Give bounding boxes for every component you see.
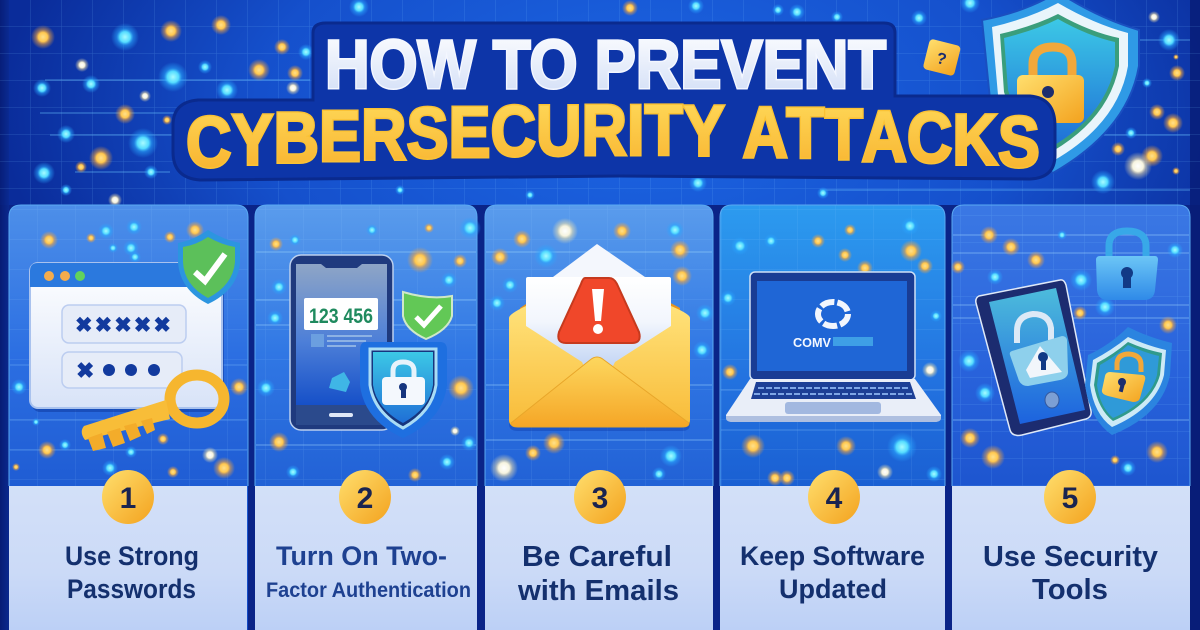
number badge 2: 2 xyxy=(357,482,373,515)
login window icon: ✖✖✖✖✖ xyxy=(75,314,173,337)
panel 1 background xyxy=(9,205,248,630)
number badge 2 xyxy=(339,470,391,524)
title line one: HOW TO PREVENT xyxy=(325,26,886,103)
smartphone with code: 123 456 xyxy=(309,305,373,328)
panel 5: use security tools xyxy=(951,205,1190,630)
small gold tag icon: ? xyxy=(935,50,948,69)
panel 2 background xyxy=(255,205,481,630)
open envelope with warning xyxy=(509,244,690,431)
small gold tag icon xyxy=(923,39,961,76)
panel 5 background xyxy=(951,205,1190,630)
number badge 4: 4 xyxy=(826,482,843,515)
tilted phone with lock xyxy=(976,280,1091,435)
laptop xyxy=(726,272,941,422)
number badge 5: 5 xyxy=(1062,482,1078,515)
smartphone with code xyxy=(290,255,393,430)
shield with gold padlock, top right xyxy=(982,0,1139,173)
step 3 label: Be Careful xyxy=(522,541,672,573)
number badge 1: 1 xyxy=(120,482,136,515)
title banner xyxy=(173,23,1055,183)
step 5 label: Use Security xyxy=(983,541,1158,573)
step 3 label: with Emails xyxy=(517,575,679,607)
title line two: CYBERSECURITY ATTACKS xyxy=(186,91,1040,183)
step 1 label: Use Strong xyxy=(65,541,199,571)
step 4 label: Keep Software xyxy=(740,541,925,571)
panel 2: two-factor authentication xyxy=(255,205,481,630)
panel 1: use strong passwords xyxy=(9,205,248,630)
step 5 label: Tools xyxy=(1032,574,1108,606)
panel 3: be careful with emails xyxy=(485,205,714,630)
screen label: COMV xyxy=(793,335,831,350)
panel 4: keep software updated xyxy=(720,205,945,630)
padlock shackle and body xyxy=(1017,47,1084,123)
step 2 footer xyxy=(255,470,477,630)
warning triangle xyxy=(558,278,640,343)
step 3 footer xyxy=(485,470,713,630)
step 1 label: Passwords xyxy=(67,574,196,604)
golden key xyxy=(82,375,224,451)
number badge 1 xyxy=(102,470,154,524)
panel 3 background xyxy=(485,205,714,630)
step 1 footer xyxy=(9,470,247,630)
step 4 footer xyxy=(720,470,945,630)
number badge 3: 3 xyxy=(592,482,608,515)
number badge 4 xyxy=(808,470,860,524)
number badge 5 xyxy=(1044,470,1096,524)
step 2 label: Factor Authentication xyxy=(266,579,471,602)
number badge 3 xyxy=(574,470,626,524)
blue shield with padlock xyxy=(360,342,447,438)
panel 4 background xyxy=(720,205,945,630)
green shield with check xyxy=(178,230,240,304)
shield with gold lock xyxy=(1085,327,1172,435)
floating blue padlock xyxy=(1096,231,1158,300)
screen logo xyxy=(818,302,848,326)
step 4 label: Updated xyxy=(779,574,887,604)
step 2 label: Turn On Two- xyxy=(276,541,447,571)
login window icon xyxy=(30,263,224,412)
step 5 footer xyxy=(952,470,1190,630)
green check shield xyxy=(403,292,452,339)
login window icon: ✖ xyxy=(76,358,94,383)
